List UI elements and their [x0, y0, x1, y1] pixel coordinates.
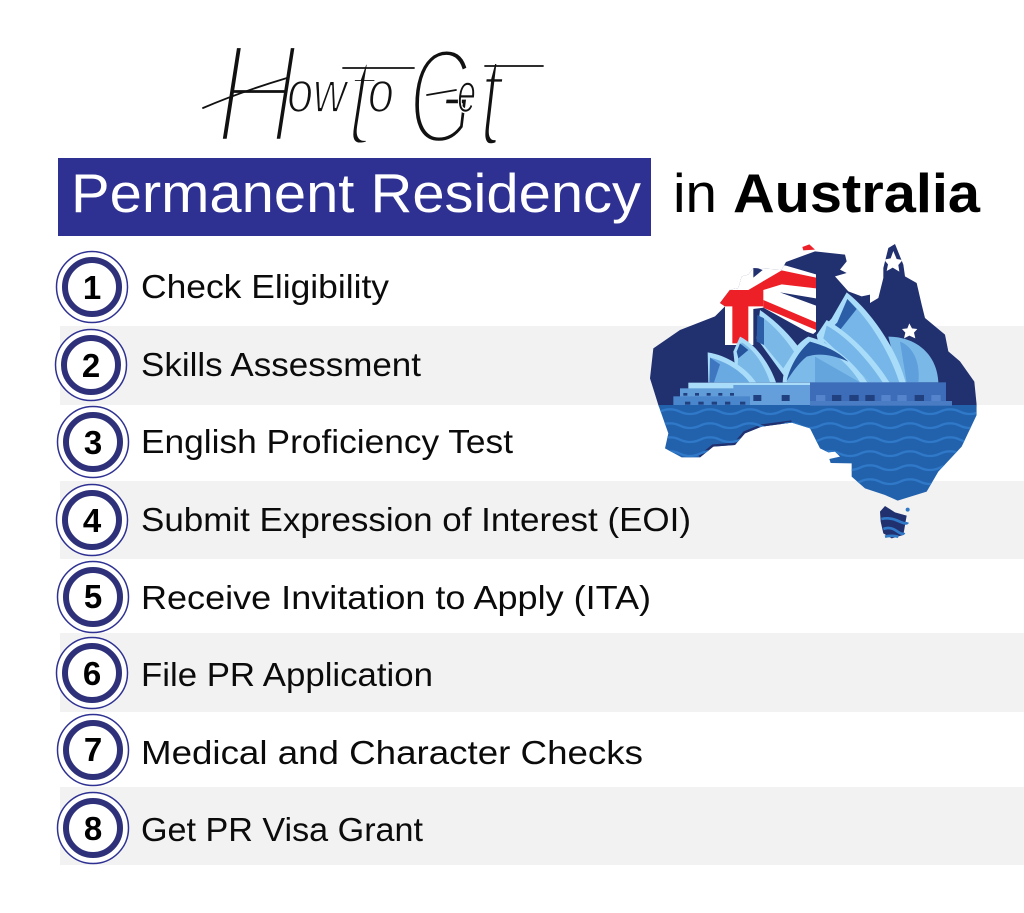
Torres island [802, 244, 815, 250]
map body [650, 244, 977, 501]
title: How to Get: H [215, 13, 299, 174]
step 3 [58, 406, 513, 478]
title: How to Get: G [409, 19, 473, 172]
step 1: 1 [83, 269, 101, 306]
step 7 [58, 714, 643, 786]
title: How to Get [203, 13, 543, 174]
water [658, 405, 977, 501]
step 4: Submit Expression of Interest (EOI) [141, 501, 691, 538]
step 7: Medical and Character Checks [141, 734, 643, 771]
Tasmania [880, 506, 910, 538]
step 4: 4 [83, 502, 102, 539]
step 5 [58, 562, 651, 632]
title: How to Get: t [480, 27, 505, 173]
step 1 [56, 252, 390, 322]
step 5: Receive Invitation to Apply (ITA) [141, 579, 651, 616]
title: How to Get: o [368, 60, 394, 125]
step 4 [56, 484, 691, 556]
heading: in Australia: Australia [733, 162, 980, 224]
step 7: 7 [84, 731, 102, 768]
step 8: Get PR Visa Grant [141, 811, 423, 848]
step 8: 8 [84, 810, 102, 847]
opera house podium [673, 382, 952, 406]
heading bar: Permanent Residency: Permanent Residency [71, 162, 642, 224]
opera house sails [708, 292, 938, 382]
map illustration: Australia with flag and Sydney Opera House [650, 244, 977, 538]
flag [717, 265, 816, 347]
title: How to Get: e [457, 61, 476, 124]
row bands [60, 326, 1024, 865]
step 5: 5 [84, 578, 102, 615]
heading: in Australia: in [673, 162, 717, 224]
step 6: 6 [83, 655, 101, 692]
step 2: Skills Assessment [141, 346, 421, 383]
step 3: English Proficiency Test [141, 423, 513, 460]
step 8 [58, 792, 423, 864]
step 3: 3 [84, 424, 102, 461]
step 2: 2 [82, 347, 100, 384]
stars [884, 251, 903, 272]
step 2 [56, 330, 421, 400]
title: How to Get: ow [287, 60, 349, 125]
title: How to Get: t [346, 27, 378, 173]
step 6: File PR Application [141, 656, 433, 693]
step 6 [56, 638, 433, 708]
step 1: Check Eligibility [141, 268, 390, 305]
